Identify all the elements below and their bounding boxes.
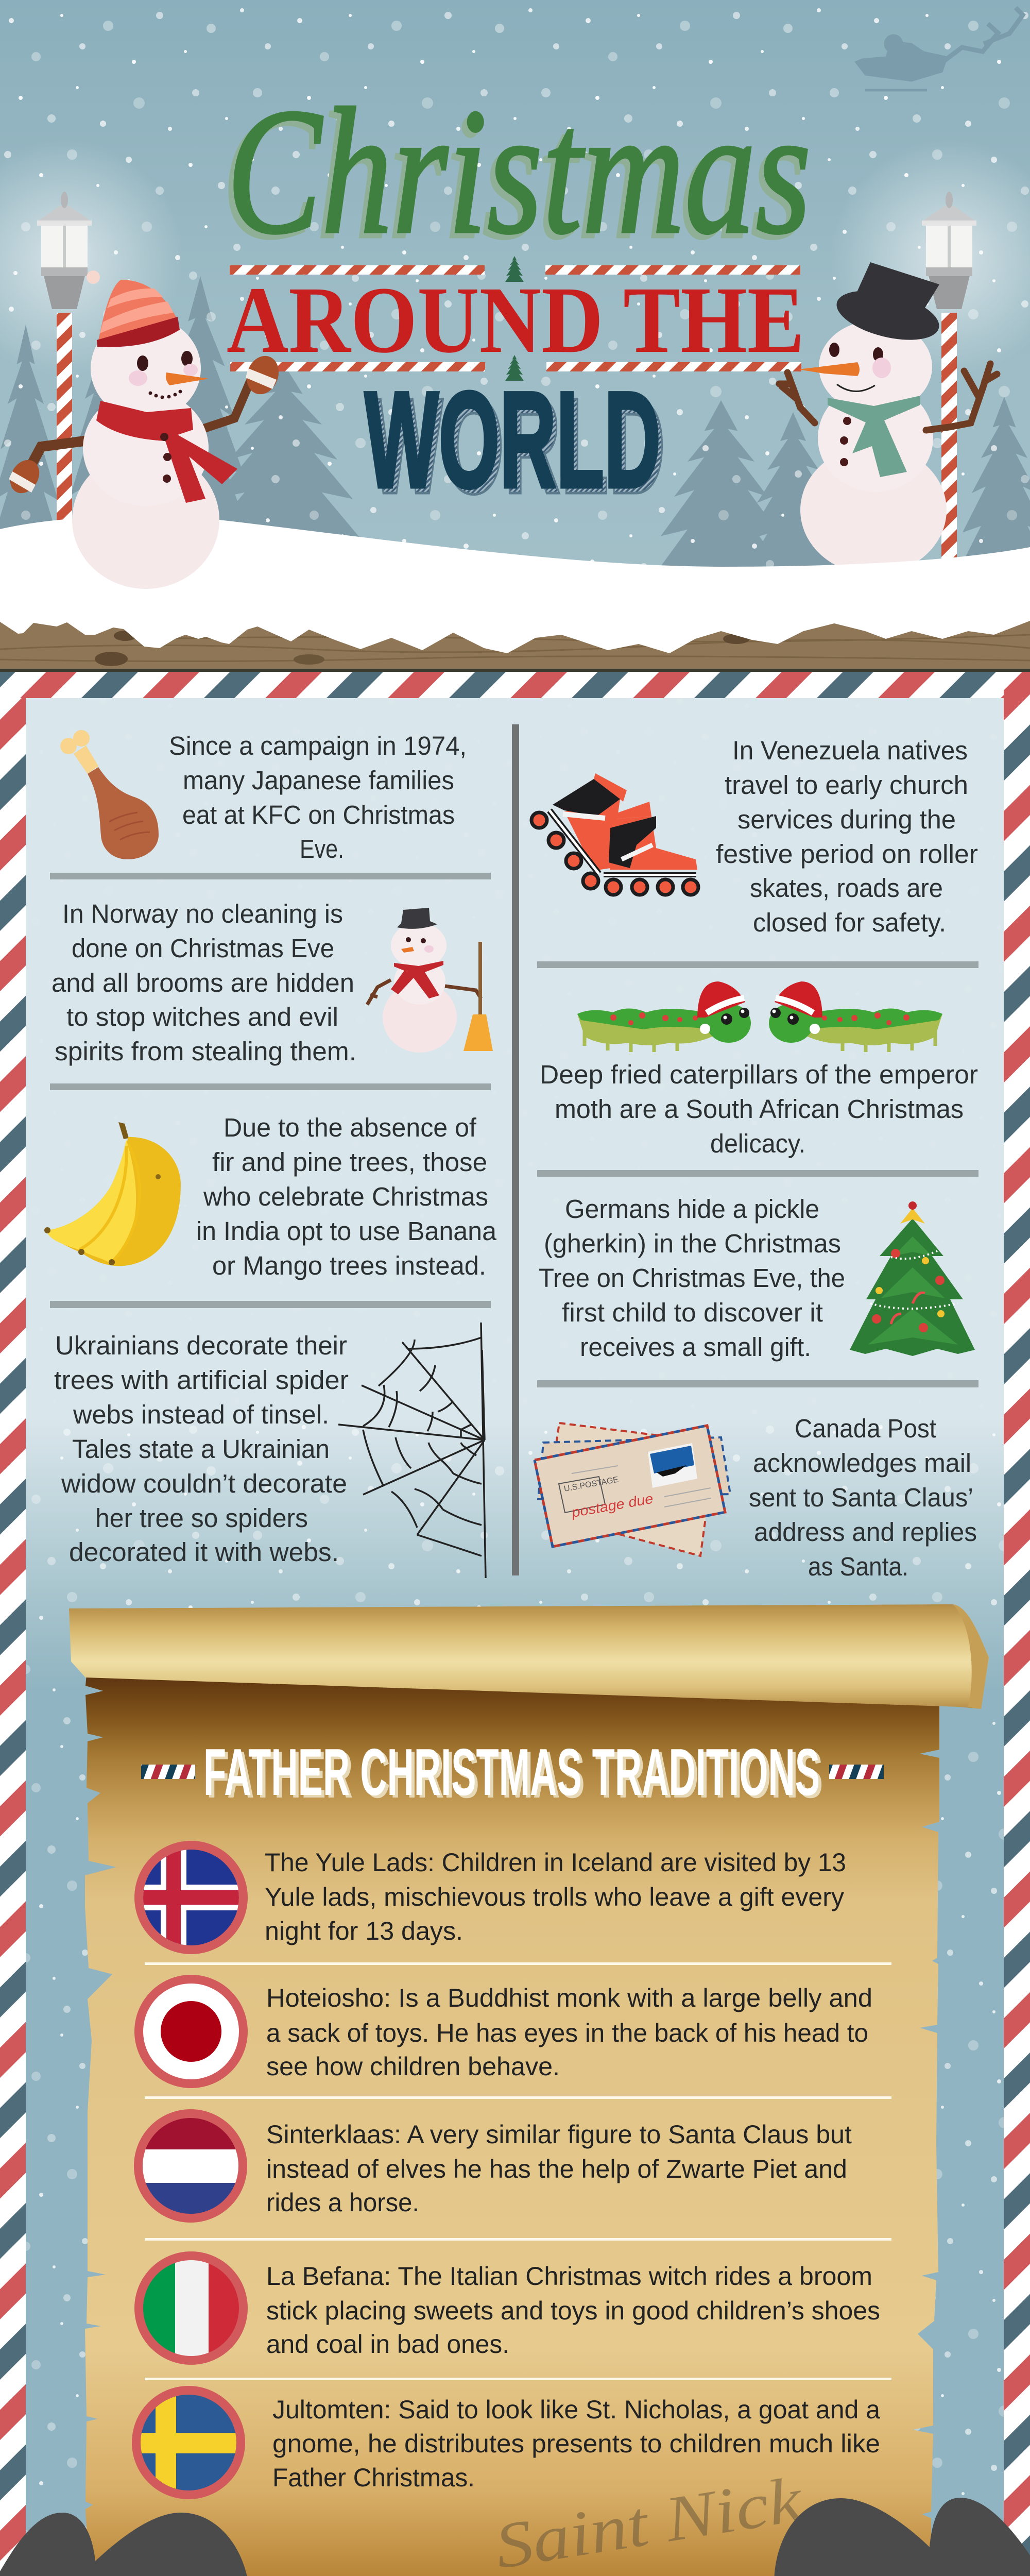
text: Norway fact: to stop witches and evil: [66, 1002, 338, 1031]
decorative candy stripes and small trees around subtitle: [230, 256, 801, 381]
text: Ukraine webs fact: decorated it with webs.: [69, 1537, 339, 1567]
header sky background: [0, 0, 1030, 626]
text: Ukraine webs fact: webs instead of tinsel.: [73, 1400, 329, 1429]
lamp post left: [37, 192, 92, 570]
text: Ukraine webs fact: [54, 1331, 349, 1567]
row: Sweden Jultomten: Jultomten: Said to look like St. Nicholas, a goat and a: [272, 2395, 880, 2424]
mitten left: [0, 2513, 250, 2576]
text: India bananas fact: [196, 1113, 497, 1280]
text: Japan KFC fact: [169, 731, 467, 863]
wood plank with snow edge: [0, 618, 1030, 672]
icon: snowman with broom: [367, 908, 493, 1053]
text: Japan KFC fact: eat at KFC on Christmas: [182, 800, 455, 829]
text: India bananas fact: in India opt to use Banana: [196, 1216, 497, 1246]
row: Iceland Yule Lads: Yule lads, mischievous trolls who leave a gift every: [265, 1883, 844, 1911]
text: Venezuela fact: skates, roads are: [750, 873, 943, 903]
subtitle: WORLD: WORLD: [365, 364, 661, 516]
row: Sweden Jultomten: [132, 2386, 880, 2499]
row: Italy La Befana: and coal in bad ones.: [266, 2330, 509, 2359]
icon: caterpillar left: [577, 981, 751, 1052]
text: Norway fact: spirits from stealing them.: [55, 1037, 356, 1066]
text: Norway fact: [52, 899, 356, 1066]
row: Japan Hoteiosho: [134, 1975, 872, 2088]
text: Canada Post fact: address and replies: [754, 1517, 977, 1547]
text: Canada Post fact: acknowledges mail: [753, 1448, 971, 1478]
text: Canada Post fact: Canada Post: [795, 1414, 936, 1443]
title: Christmas: Christmas: [221, 76, 806, 276]
icon: airmail envelopes: U.S.POSTAGE: [563, 1476, 619, 1494]
icon: chicken drumstick: [60, 730, 159, 859]
text: South Africa caterpillars fact: moth are a South African Christmas: [555, 1094, 964, 1124]
row: Iceland Yule Lads: night for 13 days.: [265, 1917, 463, 1945]
text: Ukraine webs fact: Ukrainians decorate their: [55, 1331, 347, 1360]
row: Sweden Jultomten: gnome, he distributes presents to children much like: [272, 2429, 880, 2458]
icon: airmail envelopes: [535, 1423, 730, 1556]
snowy hill: [0, 516, 1030, 649]
icon: spider web: [338, 1323, 486, 1578]
row: Netherlands Sinterklaas: Sinterklaas: A very similar figure to Santa Claus but: [266, 2120, 852, 2149]
icon: airmail envelopes: postage due: [570, 1491, 655, 1520]
text: Canada Post fact: [749, 1414, 977, 1581]
text: Japan KFC fact: many Japanese families: [183, 766, 454, 795]
row: Japan Hoteiosho: see how children behave.: [266, 2052, 560, 2081]
snowman left with striped hat: [4, 270, 284, 589]
text: Germany pickle fact: Germans hide a pickle: [565, 1194, 819, 1224]
text: Ukraine webs fact: widow couldn’t decorate: [61, 1469, 347, 1498]
lamp post right: [922, 192, 976, 570]
row: Japan Hoteiosho: a sack of toys. He has eyes in the back of his head to: [266, 2019, 868, 2047]
row: Sweden Jultomten: Father Christmas.: [272, 2463, 475, 2492]
text: Japan KFC fact: Since a campaign in 1974,: [169, 731, 467, 760]
text: Japan KFC fact: Eve.: [300, 834, 344, 863]
text: India bananas fact: fir and pine trees, those: [212, 1147, 487, 1177]
icon: christmas tree: [850, 1201, 975, 1356]
subtitle: AROUND THE: AROUND THE: [227, 267, 804, 373]
text: Germany pickle fact: receives a small gift.: [580, 1332, 811, 1362]
text: Norway fact: and all brooms are hidden: [52, 968, 354, 997]
row: Netherlands Sinterklaas: [134, 2109, 852, 2223]
text: South Africa caterpillars fact: [540, 1060, 978, 1158]
row: Italy La Befana: La Befana: The Italian Christmas witch rides a broom: [266, 2262, 872, 2291]
snowman right with top hat: [779, 262, 997, 574]
scroll: parchment body: [85, 1674, 939, 2576]
text: Germany pickle fact: [539, 1194, 845, 1362]
text: Canada Post fact: sent to Santa Claus’: [749, 1483, 973, 1512]
subtitle: WORLD: [365, 364, 665, 522]
text: Venezuela fact: festive period on roller: [716, 839, 978, 869]
scroll: top roll: [69, 1604, 989, 1709]
title: Christmas: Christmas: [227, 71, 811, 271]
row: Iceland Yule Lads: The Yule Lads: Children in Iceland are visited by 13: [265, 1848, 846, 1877]
row: Netherlands Sinterklaas: rides a horse.: [266, 2188, 419, 2217]
text: Norway fact: In Norway no cleaning is: [62, 899, 343, 928]
icon: santa sleigh silhouette: [855, 8, 1023, 90]
row: Japan Hoteiosho: Hoteiosho: Is a Buddhist monk with a large belly and: [266, 1984, 872, 2012]
text: Germany pickle fact: (gherkin) in the Christmas: [544, 1229, 841, 1258]
text: Norway fact: done on Christmas Eve: [72, 934, 334, 963]
icon: roller skates: [531, 773, 698, 895]
text: India bananas fact: or Mango trees instead.: [212, 1251, 486, 1280]
row: Iceland Yule Lads: [134, 1841, 846, 1954]
text: Venezuela fact: services during the: [737, 805, 956, 834]
text: Canada Post fact: as Santa.: [808, 1552, 908, 1581]
text: Venezuela fact: In Venezuela natives: [732, 736, 968, 765]
text: Ukraine webs fact: Tales state a Ukrainian: [72, 1434, 330, 1464]
text: India bananas fact: Due to the absence of: [224, 1113, 477, 1142]
text: Germany pickle fact: first child to discover it: [562, 1298, 823, 1327]
text: Germany pickle fact: Tree on Christmas Eve, the: [539, 1263, 845, 1293]
text: Ukraine webs fact: trees with artificial spider: [54, 1365, 349, 1395]
icon: caterpillar right: [769, 981, 942, 1052]
text: Venezuela fact: [716, 736, 978, 937]
icon: bananas: [44, 1122, 181, 1266]
text: Venezuela fact: closed for safety.: [753, 908, 946, 937]
text: India bananas fact: who celebrate Christmas: [203, 1182, 488, 1211]
text: South Africa caterpillars fact: Deep fried caterpillars of the emperor: [540, 1060, 978, 1089]
subtitle: WORLD: WORLD: [369, 370, 665, 522]
main panel background: [26, 698, 1004, 2576]
dividers of facts panel: [50, 724, 978, 1575]
mitten right: [774, 2498, 1030, 2576]
text: Ukraine webs fact: her tree so spiders: [95, 1503, 308, 1533]
text: Venezuela fact: travel to early church: [725, 770, 968, 800]
row: Italy La Befana: [134, 2251, 880, 2365]
airmail striped border: [0, 672, 1030, 2576]
row: Netherlands Sinterklaas: instead of elves he has the help of Zwarte Piet and: [266, 2155, 847, 2183]
row: Italy La Befana: stick placing sweets and toys in good children’s shoes: [266, 2296, 880, 2325]
text: South Africa caterpillars fact: delicacy.: [710, 1129, 805, 1158]
